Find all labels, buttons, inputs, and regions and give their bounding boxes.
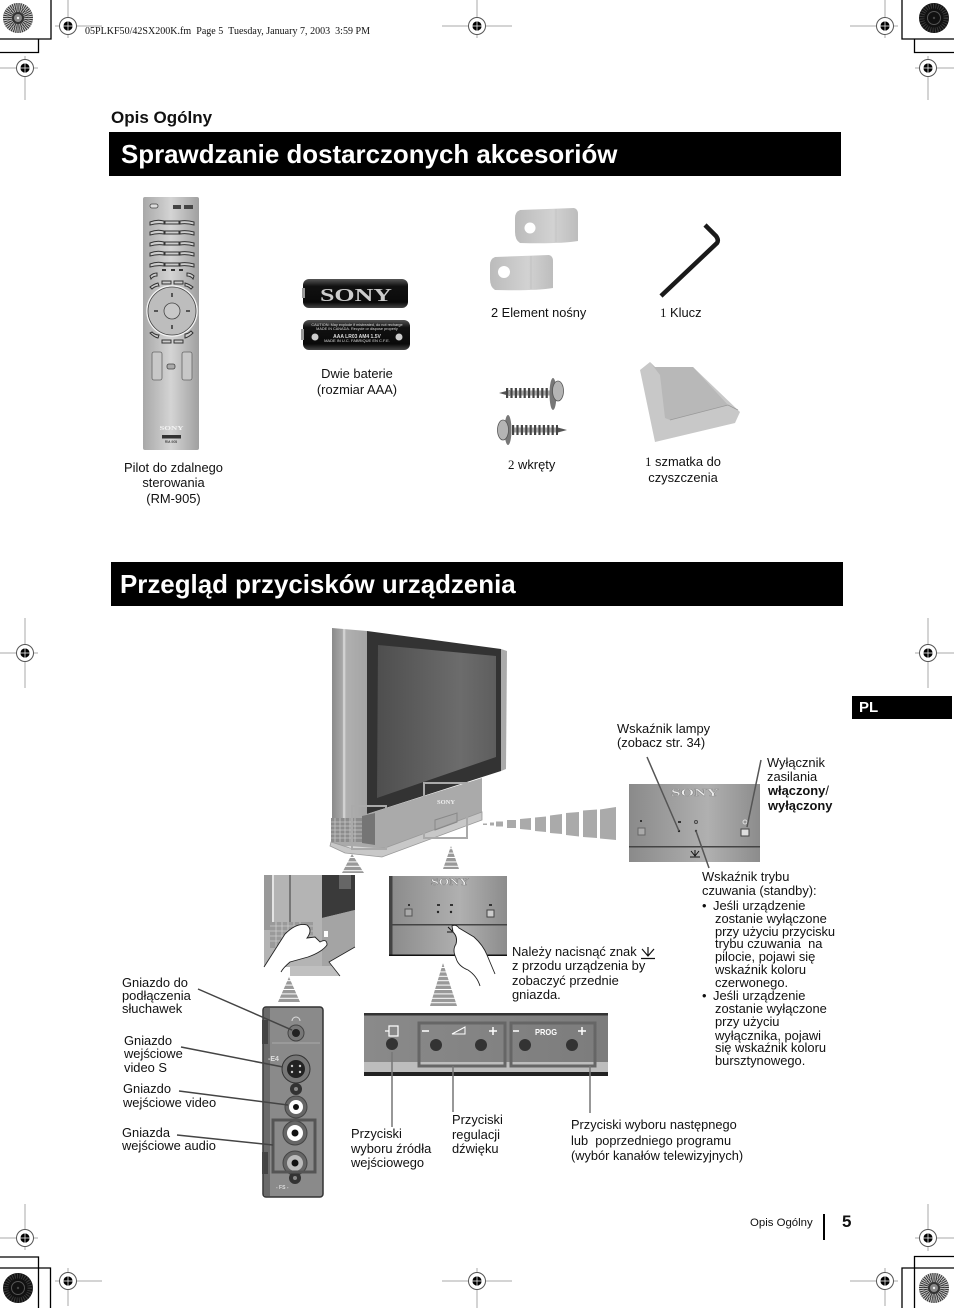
frame: audio inputs <box>273 1120 315 1172</box>
label: standby indicator: Wskaźnik trybu <box>702 869 789 884</box>
label: S-video input: wejściowe <box>123 1046 183 1061</box>
label: standby indicator: pilocie, pojawi się <box>715 949 815 964</box>
label: S-video input: video S <box>124 1060 167 1075</box>
label: video input: wejściowe video <box>122 1095 216 1110</box>
label: programme buttons: (wybór kanałów telewizyjnych) <box>571 1148 743 1163</box>
title bar: device controls: Przegląd przycisków urządzenia <box>120 571 516 599</box>
label: S-video input: Gniazdo <box>124 1033 172 1048</box>
arrow: zoom wedge to control panel <box>483 807 616 840</box>
detail frame: front panel <box>424 783 467 838</box>
label: power switch: Wyłącznik <box>767 755 825 770</box>
label: input select buttons: Przyciski <box>351 1126 402 1141</box>
icon: remote control: RM-905 <box>165 440 177 444</box>
label: input select buttons: wejściowego <box>350 1155 424 1170</box>
batteries caption: Dwie baterie <box>321 366 393 381</box>
leader lines: connectors <box>177 989 292 1145</box>
title bar: device controls <box>111 562 843 606</box>
icon: mounting brackets <box>490 208 578 290</box>
remote caption: sterowania <box>142 475 205 490</box>
brackets caption: 2 Element nośny <box>491 305 587 320</box>
title bar: accessories <box>109 132 841 176</box>
label: power switch: wyłączony <box>767 798 833 813</box>
label: standby indicator: wskaźnik koloru <box>714 962 806 977</box>
arrow: zoom to jacks <box>278 977 300 1002</box>
file info line: 05PLKF50/42SX200K.fm Page 5 Tuesday, January 7, 2003 3:59 PM <box>85 26 370 37</box>
label: standby indicator: się wskaźnik koloru <box>715 1040 826 1055</box>
label: standby indicator: czuwania (standby): <box>702 883 817 898</box>
label: standby indicator: • <box>702 988 707 1003</box>
label: standby indicator: bursztynowego. <box>715 1053 805 1068</box>
label: programme buttons: lub poprzedniego programu <box>571 1133 731 1148</box>
cloth caption: czyszczenia <box>648 470 719 485</box>
batteries caption: (rozmiar AAA) <box>317 382 397 397</box>
icon: batteries: SONY <box>320 285 392 305</box>
label: audio inputs: wejściowe audio <box>121 1138 216 1153</box>
label: standby indicator: wyłącznika, pojawi <box>714 1028 821 1043</box>
icon: remote control <box>143 197 199 450</box>
label: input select buttons: wyboru źródła <box>350 1141 432 1156</box>
label: standby indicator: zostanie wyłączone <box>715 1001 827 1016</box>
cloth caption: 1 szmatka do <box>645 454 721 469</box>
label: standby indicator: • <box>702 898 707 913</box>
illustration: television: SONY <box>437 800 456 806</box>
icon: batteries: AAA LR03 AM4 1.5V <box>333 334 382 340</box>
label: press symbol instruction: Należy nacisnąć znak <box>512 944 637 959</box>
illustration: hands opening side cover <box>264 875 355 1002</box>
label: standby indicator: czerwonego. <box>715 975 788 990</box>
leader lines: buttons <box>392 1052 590 1127</box>
label: press symbol instruction: z przodu urządzenia by <box>512 958 646 973</box>
frame: programme buttons <box>511 1023 595 1066</box>
arrow: zoom to buttons <box>430 963 457 1006</box>
label: headphone jack: podłączenia <box>122 988 192 1003</box>
footer: page label and number <box>750 1212 851 1240</box>
illustration: hand pressing front panel <box>389 876 507 1006</box>
key caption: 1 Klucz <box>660 305 702 320</box>
icon: batteries: MADE IN CANADA. Recycle or dispose properly <box>316 327 398 331</box>
footer: page label and number: 5 <box>842 1212 851 1231</box>
label: press symbol instruction: gniazda. <box>512 987 561 1002</box>
illustration: television <box>330 628 507 857</box>
remote caption: (RM-905) <box>146 491 201 506</box>
icon: batteries <box>301 279 410 350</box>
label: power switch: włączony <box>767 783 826 798</box>
illustration: connector panel <box>262 1007 323 1197</box>
language tab: PL <box>859 699 878 716</box>
icon: batteries: MADE IN U.C. FABRIQUE EN C.F.E. <box>324 338 390 343</box>
label: press symbol instruction: zobaczyć przednie <box>512 973 619 988</box>
label: press symbol instruction <box>512 944 655 1002</box>
illustration: front button strip: PROG <box>535 1027 557 1037</box>
illustration: control panel close-up <box>629 784 760 862</box>
label: headphone jack: słuchawek <box>122 1001 183 1016</box>
leader lines: control panel <box>647 757 761 868</box>
frame: volume buttons <box>419 1023 505 1066</box>
illustration: connector panel: -E4 <box>268 1056 279 1063</box>
label: headphone jack: Gniazdo do <box>122 975 188 990</box>
footer: page label and number: Opis Ogólny <box>750 1217 813 1229</box>
label: standby indicator: zostanie wyłączone <box>715 911 827 926</box>
section heading: Opis Ogólny <box>111 108 213 127</box>
label: standby indicator: Jeśli urządzenie <box>713 898 805 913</box>
illustration: connector panel: - FS - <box>276 1185 289 1191</box>
icon: remote control: SONY <box>160 426 184 432</box>
remote caption: Pilot do zdalnego <box>124 460 223 475</box>
language tab <box>852 696 952 719</box>
label: standby indicator: Jeśli urządzenie <box>713 988 805 1003</box>
detail frame: side panel <box>352 806 386 849</box>
label: audio inputs: Gniazda <box>122 1125 171 1140</box>
label: volume buttons: regulacji <box>452 1127 500 1142</box>
illustration: control panel close-up: SONY <box>671 788 720 799</box>
label: power switch: / <box>825 783 829 798</box>
illustration: front button strip <box>364 1013 608 1076</box>
title bar: accessories: Sprawdzanie dostarczonych akcesoriów <box>121 141 618 169</box>
icon: screws <box>498 378 567 445</box>
icon: allen key <box>661 225 718 296</box>
illustration: hand pressing front panel: SONY <box>431 877 470 887</box>
label: video input: Gniazdo <box>123 1081 171 1096</box>
arrow: zoom to front panel <box>443 846 459 869</box>
label: standby indicator: przy użyciu przycisku <box>715 924 835 939</box>
label: programme buttons: Przyciski wyboru następnego <box>571 1117 737 1132</box>
icon: cleaning cloth <box>640 362 740 442</box>
label: lamp indicator: (zobacz str. 34) <box>617 735 705 750</box>
icon: batteries: CAUTION: May explode if mistreated, do not recharge <box>311 323 403 327</box>
label: lamp indicator: Wskaźnik lampy <box>617 721 711 736</box>
label: power switch: zasilania <box>767 769 818 784</box>
screws caption: 2 wkręty <box>508 457 556 472</box>
label: standby indicator: trybu czuwania na <box>715 936 823 951</box>
label: volume buttons: Przyciski <box>452 1112 503 1127</box>
label: standby indicator: przy użyciu <box>715 1014 779 1029</box>
label: volume buttons: dźwięku <box>452 1141 499 1156</box>
arrow: zoom to side panel <box>342 854 364 873</box>
